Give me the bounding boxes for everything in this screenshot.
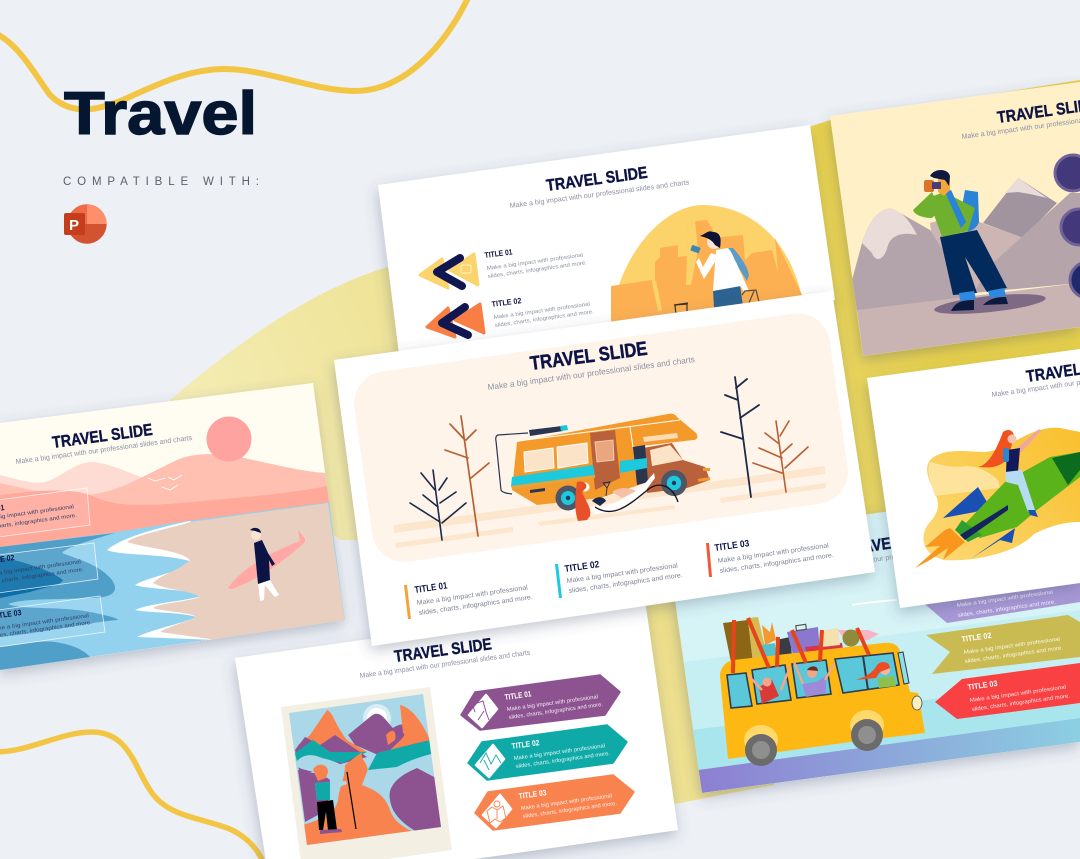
text: title 02 [511,738,611,770]
text: arrow 01: slides, charts, infographics and more. [957,599,1057,619]
top wavy line [0,0,468,109]
panel: slide with photographer and mountains [830,82,1080,356]
icon: orange chevrons [427,304,484,337]
slide subheading: Make a big impact with our professional slides and charts [800,540,978,574]
icon: mountains badge [476,745,504,777]
text: title 03 [518,788,618,820]
bottom wavy line [0,732,263,859]
text: title 02: slides, charts, infographics and more. [494,309,595,329]
text: title 01: Make a big impact with professional [486,253,583,272]
slide heading: TRAVEL SLIDE [529,338,649,375]
text: title 01: TITLE 01 [414,580,449,596]
text: title 03: Make a big impact with professional [520,793,612,812]
text: title 02 [491,296,595,329]
bus illustration [720,617,925,766]
text: title 02: Make a big impact with professional [513,743,605,762]
illustration: photographer [913,170,1047,318]
text: arrow 02: slides, charts, infographics and more. [964,645,1064,665]
text: title 01: slides, charts, infographics and more. [487,260,588,280]
panel: slide with hiker [235,600,678,859]
text: title 01 [504,689,604,721]
text: title 01 [414,580,533,617]
arrow: red title 03 [935,663,1080,719]
slide subheading: Make a big impact with our professional slides and charts [487,354,695,392]
panel: slide with rocket [867,349,1080,608]
text: arrow 03 [967,679,1071,713]
illustration: navy small tree [410,470,466,540]
slide heading: TRAVEL SLIDE [545,164,649,195]
callout box 01 [0,488,90,537]
illustration: navy tall tree [721,377,759,497]
icons: round badges [1055,155,1080,298]
text: arrow 01 [956,590,1057,619]
slide heading: TRAVEL SLIDE [393,635,493,666]
icon: map badge [483,795,511,827]
text: arrow 02: TITLE 02 [961,631,992,644]
text: title 02: Make a big impact with professional [493,302,590,321]
text: title 02: TITLE 02 [564,559,600,575]
illustration: reclining woman [575,473,678,521]
icon: yellow chevrons [420,254,478,288]
icon: PowerPoint [64,204,107,244]
illustration: camper van [496,414,710,510]
slide subheading: Make a big impact with our professional slides and charts [15,433,193,466]
illustration: mountains [852,178,1080,356]
text: title 02: TITLE 02 [511,738,540,751]
illustration: brown small tree [753,421,808,492]
inner cream panel [350,309,852,566]
text: title 03: TITLE 03 [518,788,547,801]
illustration: hiker in mountains [289,694,445,850]
compatible with label: COMPATIBLE WITH: [63,176,259,188]
panel: slide with school bus [667,484,1080,793]
text: arrow 01: Make a big impact with professional [956,590,1053,609]
text: title 03: slides, charts, infographics and more. [522,801,618,820]
arrow: purple title 01 [920,580,1080,623]
slide heading: TRAVEL SLIDE [51,421,154,452]
accent bar 01 [404,585,411,619]
text: title 03 [714,538,834,575]
accent bar 03 [706,543,712,577]
illustration: city dome with traveller [610,205,802,322]
text: title 02: TITLE 02 [491,296,522,309]
accent bar 02 [555,564,562,598]
text: title 01: TITLE 01 [484,247,513,260]
text: title 02 [564,559,683,595]
arrow: purple title 01 [461,675,620,730]
text: arrow 02: Make a big impact with professional [963,637,1060,656]
callout box 02 [0,543,98,593]
text: title 01: slides, charts, infographics and more. [508,702,604,721]
illustration: surfer [228,528,305,601]
text: title 03: TITLE 03 [714,538,750,554]
text: title 01 [484,247,588,280]
panel: main slide with camper van [334,291,875,646]
slide heading: TRAVEL SLIDE [843,527,946,559]
icon: PowerPoint: P [69,217,79,234]
panel: slide with traveller and city [378,125,835,362]
text: arrow 03: Make a big impact with professional [969,685,1066,704]
text: title 02: slides, charts, infographics and more. [515,751,611,770]
panel: slide with surfer [0,383,345,680]
text: arrow 02 [961,631,1064,665]
yellow background blob [170,80,1080,810]
slide subheading: Make a big impact with our professional slides and charts [509,177,690,210]
text: title 03: slides, charts, infographics and more. [719,552,834,575]
text: title 02: slides, charts, infographics and more. [568,572,683,595]
arrow: olive title 02 [926,615,1080,674]
arrow: orange title 03 [475,775,634,830]
text: arrow 03: slides, charts, infographics and more. [971,693,1071,713]
text: arrow 03: TITLE 03 [967,679,998,692]
text: title 02: Make a big impact with professional [566,562,679,585]
title: Travel [64,80,257,147]
text: title 01: Make a big impact with professional [506,694,598,713]
illustration: beach scene [0,454,345,680]
illustration: rocket girl [915,428,1080,568]
text: title 01: slides, charts, infographics and more. [418,594,533,617]
text: title 03: Make a big impact with professional [717,542,830,565]
ground strips [394,466,826,548]
illustration: polaroid frame [281,687,452,859]
text: title 01: Make a big impact with professional [416,584,529,607]
icon: hiker badge [469,695,497,727]
arrow: teal title 02 [468,725,627,780]
illustration: brown tall tree [445,416,489,536]
illustration: sea and road [677,600,1080,793]
text: title 01: TITLE 01 [504,689,532,702]
callout box 03 [0,596,105,647]
slide subheading: Make a big impact with our professional slides and charts [359,648,531,680]
icon: sun [206,416,252,462]
